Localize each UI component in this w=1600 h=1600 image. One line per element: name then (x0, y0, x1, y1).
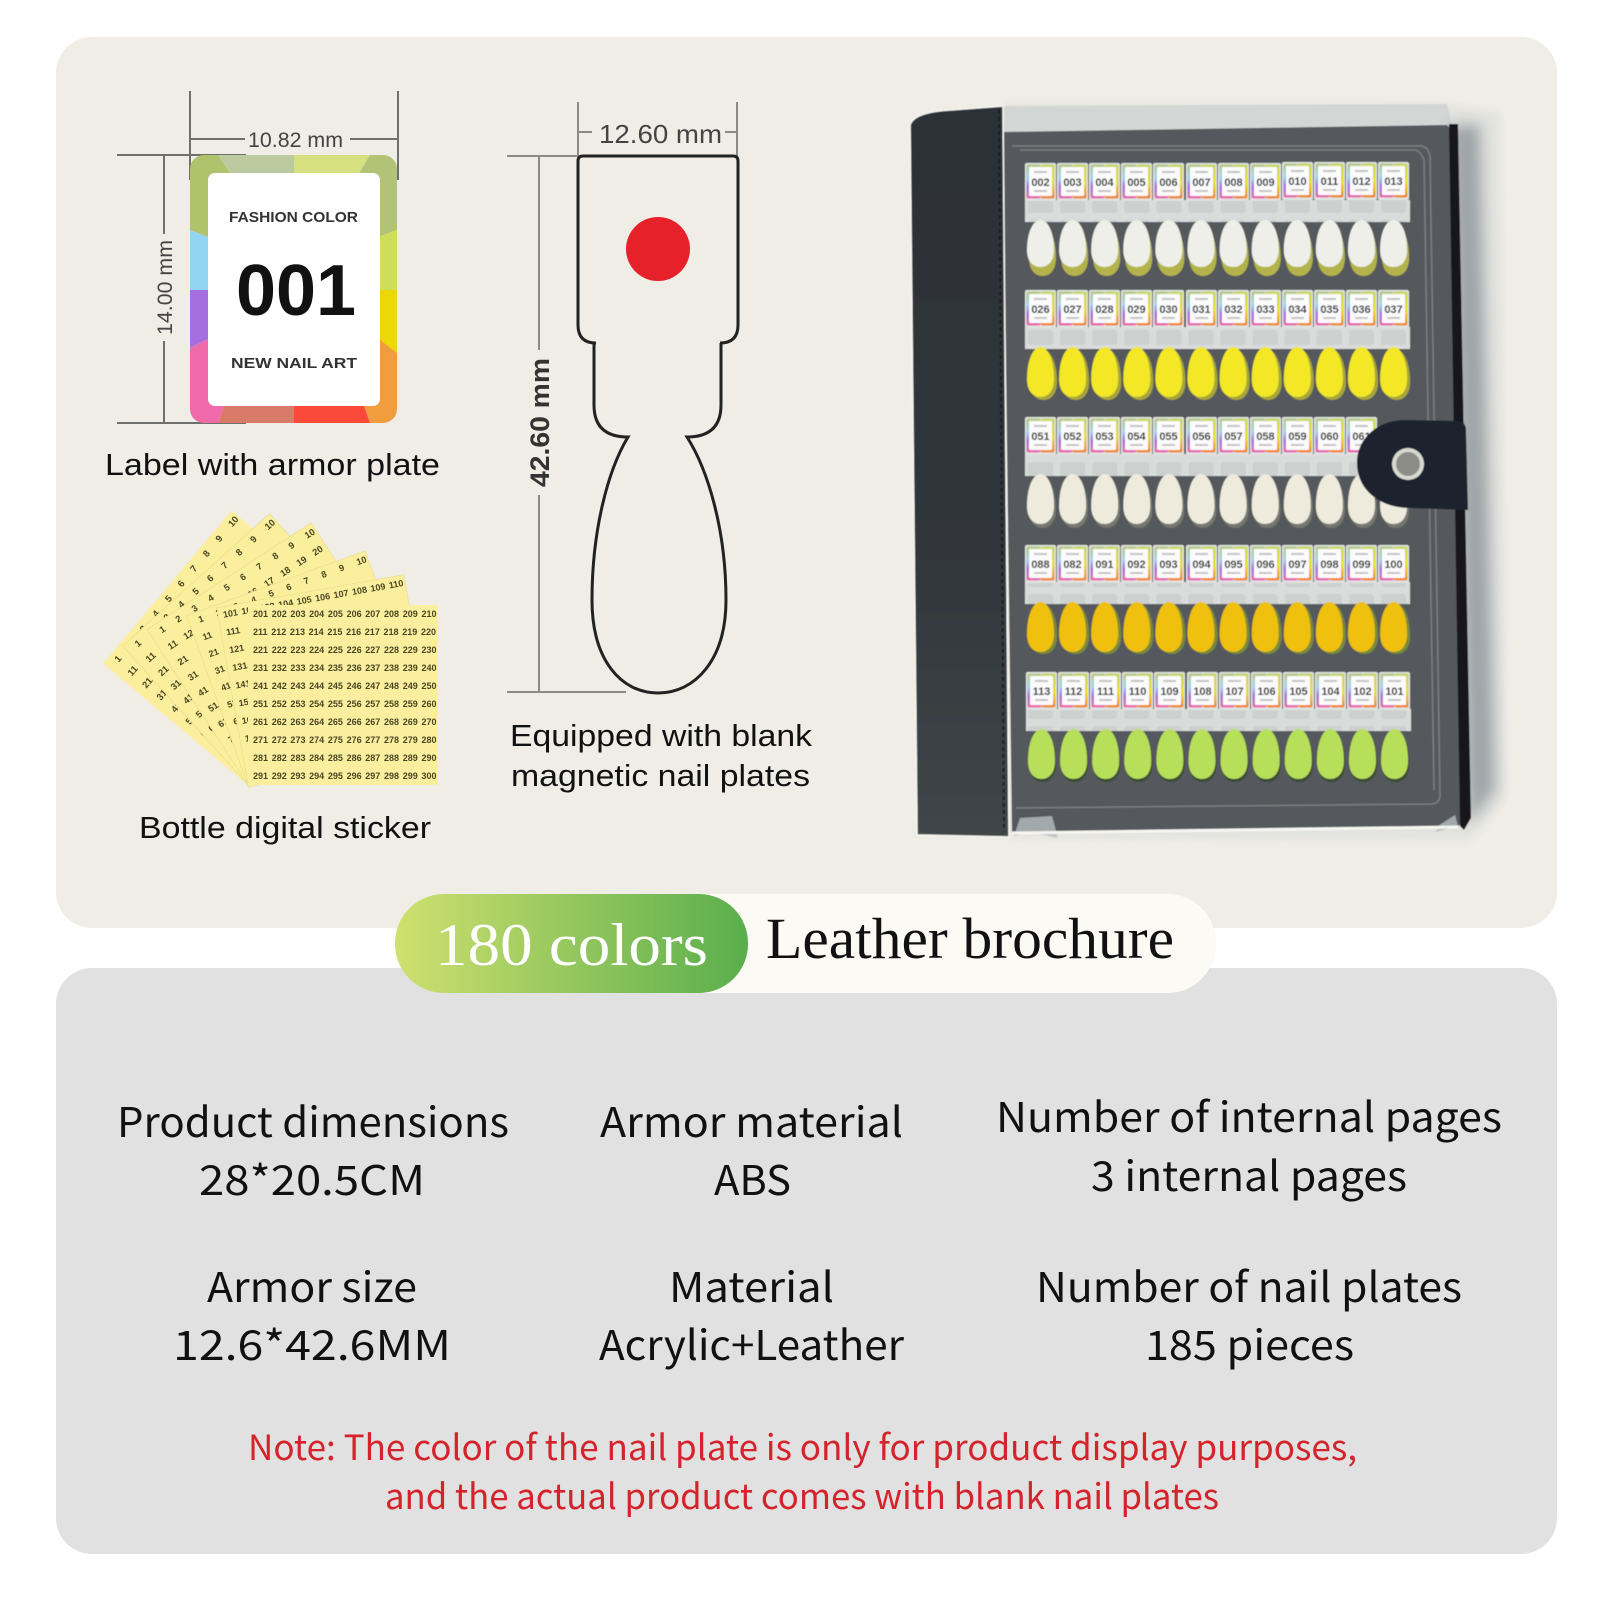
sticker sheet 2: 91 (244, 761, 258, 776)
spec: internal pages (996, 1084, 1502, 1203)
labels row 1: 011 (1321, 176, 1338, 188)
labels row 5: 113 (1033, 686, 1050, 698)
labels row 1: 005 (1127, 177, 1146, 189)
labels row 5: 109 (1160, 686, 1179, 698)
tray inner rims (1012, 146, 1440, 808)
labels row 3: 056 (1192, 431, 1211, 443)
sticker sheet 5 (217, 575, 435, 787)
labels row 2: 027 (1063, 304, 1082, 316)
nails row 3 (1027, 474, 1407, 524)
labels row 5: 107 (1225, 686, 1244, 698)
labels row 2: 033 (1256, 304, 1275, 316)
sticker sheet 3: 71 (226, 731, 241, 745)
labels row 3: 051 (1031, 431, 1050, 443)
labels row 4: 097 (1288, 559, 1307, 571)
snap button (1392, 448, 1424, 480)
title pill: white tab (700, 894, 1216, 993)
spec: internal pages: 3 internal pages (1091, 1143, 1407, 1203)
sticker sheet front (248, 605, 438, 785)
labels row 1: 012 (1352, 176, 1371, 188)
labels row 2: 029 (1127, 304, 1146, 316)
sticker sheet 3: 81 (237, 747, 251, 761)
labels row 3: 055 (1159, 431, 1178, 443)
sticker sheets fan (103, 511, 438, 787)
sticker sheet 2: 61 (206, 719, 221, 734)
sticker sheet 2: 31 (169, 678, 183, 692)
labels row 3: 059 (1288, 431, 1307, 443)
spec: armor material: Armor material (600, 1089, 903, 1149)
label diagram with dimensions (117, 91, 398, 423)
sticker sheet 1: 11 (126, 664, 141, 679)
spec: armor size: 12.6*42.6MM (173, 1312, 451, 1372)
label text: 001: 001 (236, 251, 356, 331)
sticker sheet 2: 11 (144, 650, 158, 664)
sticker sheet 1: 71 (213, 736, 228, 751)
connector strip row 2 (1025, 327, 1410, 349)
labels row 1: 010 (1288, 176, 1307, 188)
sticker sheet 2: 1 2 3 4 5 6 7 8 9 10 (133, 517, 277, 649)
label white card (208, 173, 380, 406)
spec: number of nail plates (1036, 1254, 1462, 1372)
caption: label with armor plate: Label with armor plate (105, 447, 440, 482)
label text: FASHION COLOR: FASHION COLOR (229, 209, 358, 226)
sticker sheet 4: 91 (250, 765, 263, 778)
labels row 2: 035 (1320, 304, 1339, 316)
caption: blank magnetic plates: magnetic nail plates (511, 758, 810, 793)
sticker sheet front: 231 232 233 234 235 236 237 238 239 240 (253, 663, 436, 673)
sticker sheet 5: 181 (247, 749, 264, 761)
spec: material: Acrylic+Leather (599, 1312, 904, 1372)
red note: and the actual product comes with blank nail plates (385, 1469, 1219, 1520)
labels row 2 (1025, 290, 1409, 328)
labels row 5: 105 (1289, 686, 1308, 698)
leather spine (910, 106, 1009, 837)
labels row 5 (1026, 672, 1410, 710)
sticker sheet front: 281 282 283 284 285 286 287 288 289 290 (253, 753, 436, 763)
nails row 2 (1027, 347, 1407, 397)
labels row 4: 088 (1031, 559, 1050, 571)
spec: armor size (173, 1254, 451, 1372)
sticker sheet 5: 161 (241, 714, 257, 726)
spec: product dimensions (117, 1089, 509, 1207)
spec: internal pages: Number of internal pages (996, 1084, 1502, 1144)
shadow and clear sleeve right (1003, 105, 1505, 840)
title: Leather brochure: Leather brochure (766, 906, 1174, 971)
dimension lines: plate (507, 102, 737, 692)
labels row 4 (1025, 545, 1409, 583)
spec: armor size: Armor size (207, 1254, 417, 1314)
sleeve top band (1003, 104, 1452, 133)
sticker sheet 1: 91 (242, 761, 257, 776)
labels row 3 (1025, 417, 1377, 455)
labels row 3: 061 (1352, 431, 1371, 443)
title: 180 colors: 180 colors (435, 912, 708, 978)
labels row 4: 093 (1159, 559, 1178, 571)
sticker sheet 4: 11 (201, 630, 213, 642)
sticker sheet front: 291 292 293 294 295 296 297 298 299 300 (253, 771, 436, 781)
under-nails row 5 (1029, 732, 1409, 782)
sticker sheet 1: 31 (155, 688, 170, 703)
labels row 5: 112 (1065, 686, 1082, 698)
cast shadow (1450, 125, 1495, 825)
sticker sheet front: 201 202 203 204 205 206 207 208 209 210 (253, 609, 436, 619)
nails row 4 (1027, 602, 1407, 652)
sticker sheet 4: 21 (207, 646, 220, 659)
labels row 2: 030 (1159, 304, 1178, 316)
labels row 2: 036 (1352, 304, 1371, 316)
labels row 1: 013 (1384, 176, 1403, 188)
sticker sheet 1: 61 (198, 724, 213, 739)
sticker sheet 3: 41 (196, 684, 210, 698)
sticker sheet 3: 31 (186, 669, 200, 683)
labels row 4: 092 (1127, 559, 1146, 571)
spec: material (599, 1254, 904, 1372)
red note (248, 1420, 1357, 1520)
sticker sheet 4: 51 (226, 697, 239, 710)
sticker sheet 3: 21 (176, 653, 190, 667)
dimension: 42.60 mm: 42.60 mm (525, 358, 555, 487)
sticker sheet front: 251 252 253 254 255 256 257 258 259 260 (253, 699, 436, 709)
spec: product dimensions: Product dimensions (117, 1089, 509, 1149)
spec: material: Material (669, 1254, 834, 1314)
labels row 4: 100 (1384, 559, 1403, 571)
panel: specifications background (56, 968, 1557, 1554)
rainbow label frame (190, 155, 397, 423)
sticker sheet 4: 71 (238, 731, 251, 744)
labels row 3: 057 (1224, 431, 1243, 443)
caption: bottle digital sticker: Bottle digital sticker (139, 810, 431, 845)
spec: armor material (600, 1089, 903, 1207)
labels row 3: 053 (1095, 431, 1114, 443)
panel: product overview background (56, 37, 1557, 928)
caption: blank magnetic plates: Equipped with blank (510, 718, 813, 753)
sticker sheet 5: 171 (244, 731, 261, 744)
labels row 1: 004 (1095, 177, 1115, 189)
spec: product dimensions: 28*20.5CM (199, 1147, 425, 1207)
labels row 2: 026 (1031, 304, 1050, 316)
labels row 1: 006 (1159, 177, 1178, 189)
sticker sheet 3: 51 (206, 700, 220, 714)
sticker sheet front: 241 242 243 244 245 246 247 248 249 250 (253, 681, 436, 691)
labels row 4: 098 (1320, 559, 1339, 571)
labels row 4: 094 (1192, 559, 1212, 571)
sticker sheet 1: 81 (227, 749, 242, 764)
labels row 4: 095 (1224, 559, 1243, 571)
leather brochure product photo (910, 104, 1505, 840)
sticker sheet 2: 21 (156, 664, 171, 678)
labels row 5: 106 (1257, 686, 1276, 698)
sticker sheet 5: 111 (225, 625, 241, 637)
sticker sheet 4: 61 (232, 714, 245, 727)
sleeve corner reflections (1014, 815, 1458, 838)
labels row 4: 082 (1063, 559, 1082, 571)
sticker sheet 1 (103, 511, 378, 786)
spine stitching (999, 110, 1004, 832)
row 2: nails 026-037 (1025, 290, 1410, 400)
sticker sheet 3: 91 (247, 762, 261, 776)
white sleeve highlight (1012, 827, 1458, 833)
sticker sheet 2: 51 (194, 705, 208, 720)
labels row 1: 007 (1192, 177, 1211, 189)
labels row 5: 102 (1353, 686, 1372, 698)
labels row 2: 028 (1095, 304, 1114, 316)
sticker sheet 3 (147, 523, 413, 787)
sticker sheet 4: 1 2 3 4 5 6 7 8 9 10 (197, 554, 368, 625)
under-nails row 3 (1029, 478, 1409, 528)
spec: number of nail plates: Number of nail plates (1036, 1254, 1462, 1314)
nails row 5 (1028, 729, 1408, 779)
sticker sheet 1: 1 2 3 4 5 6 7 8 9 10 (113, 514, 241, 665)
magnet red dot (626, 217, 690, 281)
connector strip row 1 (1025, 200, 1410, 222)
labels row 1: 009 (1256, 177, 1275, 189)
tray body (1003, 125, 1468, 832)
sticker sheet front: 221 222 223 224 225 226 227 228 229 230 (253, 645, 436, 655)
labels row 2: 034 (1288, 304, 1308, 316)
sticker sheet 5: 151 (238, 696, 254, 708)
under-nails row 1 (1029, 226, 1409, 276)
dimension: 12.60 mm: 12.60 mm (599, 119, 722, 149)
sticker sheet 4: 41 (220, 680, 232, 693)
sticker sheet 1: 21 (140, 676, 155, 691)
under-nails row 2 (1030, 350, 1410, 400)
connector strip row 5 (1026, 709, 1411, 731)
labels row 3: 054 (1127, 431, 1147, 443)
sticker sheet 3: 11 12 13 14 15 16 17 18 19 20 (166, 544, 325, 652)
spec: number of nail plates: 185 pieces (1145, 1312, 1354, 1372)
labels row 5: 108 (1193, 686, 1212, 698)
nail plate diagram with dimensions (507, 102, 738, 693)
dimension: 14.00 mm: 14.00 mm (154, 240, 177, 335)
sticker sheet 2: 71 (219, 733, 233, 748)
sticker sheet 3: 61 (216, 716, 230, 729)
connector strip row 4 (1025, 582, 1410, 604)
caption: blank magnetic plates (510, 718, 813, 793)
row 1: nails 002-013 (1025, 162, 1410, 276)
nail plate outline (578, 156, 738, 693)
sticker sheet front: 211 212 213 214 215 216 217 218 219 220 (253, 627, 436, 637)
labels row 1: 008 (1224, 177, 1243, 189)
row 5: nails 113-101 (1026, 672, 1411, 782)
row 4: nails 088-100 (1025, 545, 1410, 654)
dimension lines: label (117, 91, 398, 423)
sticker sheet 5: 191 (250, 767, 267, 779)
sticker sheet front: 271 272 273 274 275 276 277 278 279 280 (253, 735, 436, 745)
sticker sheet 5: 131 (232, 660, 248, 673)
sticker sheet 1: 51 (184, 712, 199, 727)
sticker sheet 5: 121 (228, 643, 245, 655)
labels row 2: 031 (1192, 304, 1211, 316)
labels row 1: 002 (1031, 177, 1050, 189)
labels row 3: 058 (1256, 431, 1275, 443)
black cover edge (1449, 124, 1471, 830)
sticker sheet 4: 81 (244, 748, 257, 761)
sticker sheet 3: 1 2 3 4 5 6 7 8 9 10 (157, 527, 317, 635)
labels row 4: 099 (1352, 559, 1371, 571)
sticker sheet 2 (123, 514, 396, 787)
sticker sheet 5: 101 102 103 104 105 106 107 108 109 110 (222, 578, 404, 620)
labels row 5: 104 (1321, 686, 1341, 698)
row 3: nails 051-061 (1025, 417, 1410, 528)
sticker sheet 2: 41 (181, 692, 196, 706)
connector strip row 3 (1025, 454, 1410, 476)
labels row 1: 003 (1063, 177, 1082, 189)
title pill: green tab (395, 894, 748, 993)
leather clasp (1357, 420, 1468, 510)
labels row 1 (1025, 162, 1409, 201)
labels row 4: 096 (1256, 559, 1275, 571)
label text: NEW NAIL ART: NEW NAIL ART (231, 355, 357, 372)
labels row 5: 110 (1129, 686, 1146, 698)
nails row 1 (1027, 220, 1407, 267)
labels row 5: 111 (1097, 686, 1114, 698)
sticker sheet 4: 31 (213, 663, 226, 676)
labels row 3: 060 (1320, 431, 1339, 443)
dimension: 10.82 mm: 10.82 mm (248, 129, 343, 152)
labels row 4: 091 (1095, 559, 1114, 571)
sticker sheet 5: 141 (235, 678, 251, 691)
red note: Note: The color of the nail plate is only for product display purposes, (248, 1420, 1357, 1471)
labels row 5: 101 (1385, 686, 1404, 698)
sticker sheet 2: 81 (231, 747, 246, 762)
spec: armor material: ABS (714, 1147, 791, 1207)
under-nails row 4 (1030, 604, 1410, 654)
labels row 2: 037 (1384, 304, 1403, 316)
sticker sheet front: 261 262 263 264 265 266 267 268 269 270 (253, 717, 436, 727)
labels row 3: 052 (1063, 431, 1082, 443)
labels row 2: 032 (1224, 304, 1243, 316)
sticker sheet 1: 41 (169, 700, 184, 715)
sticker sheet 4 (186, 551, 427, 787)
